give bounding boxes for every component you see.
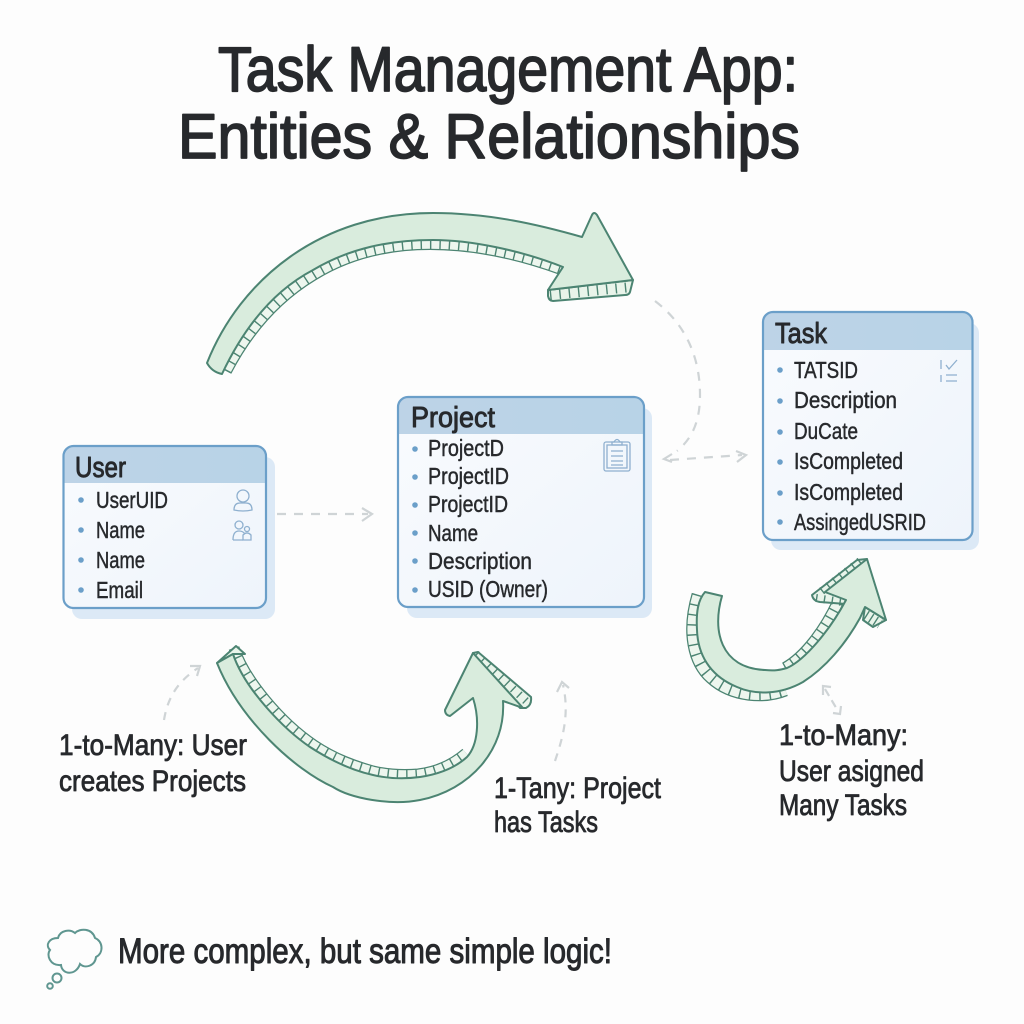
connector: dashed pointer to User arrow: [164, 666, 200, 720]
label: user assigned many tasks: [779, 719, 924, 822]
panel: User: [64, 446, 275, 619]
heading: Task: Task: [775, 318, 827, 350]
heading: Project: Project: [411, 402, 495, 434]
title: [178, 35, 800, 172]
fields: Project: Name: [428, 520, 478, 546]
fields: Task: AssingedUSRID: [794, 509, 926, 535]
fields: Task: Description: [794, 387, 897, 413]
fields: Task: DuCate: [794, 418, 858, 444]
icon: user: [234, 490, 252, 511]
label: user creates projects: creates Projects: [59, 765, 246, 798]
fields: User: Name: [96, 547, 145, 573]
fields: Project: ProjectD: [428, 435, 504, 461]
fields: User: [78, 487, 168, 603]
label: user creates projects: [59, 729, 247, 798]
icon: thought cloud: [47, 930, 102, 989]
label: user creates projects: 1-to-Many: User: [59, 729, 247, 762]
title: Task Management App:: [218, 35, 798, 105]
footer message: More complex, but same simple logic!: [118, 932, 612, 971]
arrow: lower arrow from Project to Task: [694, 559, 886, 694]
fields: Project: ProjectID: [428, 491, 508, 517]
fields: Project: ProjectID: [428, 463, 509, 489]
label: project has tasks: 1-Tany: Project: [494, 772, 662, 805]
fields: User: Name: [96, 517, 145, 543]
fields: User: UserUID: [96, 487, 168, 513]
label: user assigned many tasks: Many Tasks: [779, 789, 907, 822]
fields: Task: [777, 357, 926, 535]
connector: dashed pointer to Project arrow: [555, 682, 569, 761]
label: project has tasks: has Tasks: [494, 806, 598, 839]
connector: dashed curve from top arrow to Project: [655, 301, 700, 462]
fields: User: Email: [96, 577, 143, 603]
arrow: top curved arrow from User to Task: [207, 213, 633, 374]
fields: Project: USID (Owner): [428, 576, 548, 602]
fields: Project: [412, 435, 548, 602]
label: project has tasks: [494, 772, 662, 839]
connector: dashed arrow Project to Task: [670, 451, 746, 462]
label: user assigned many tasks: 1-to-Many:: [779, 719, 908, 752]
panel: Task: [763, 312, 979, 550]
fields: Task: IsCompleted: [794, 479, 903, 505]
fields: Project: Description: [428, 548, 532, 574]
connector: dashed arrow User to Project: [277, 508, 372, 521]
icon: clipboard: [604, 440, 630, 471]
arrow: lower arrow from User to Project: [217, 646, 531, 802]
fields: Task: TATSID: [794, 357, 858, 383]
panel: Project: [398, 397, 652, 618]
title: Entities & Relationships: [178, 102, 800, 172]
icon: checklist: [941, 360, 957, 382]
connector: dashed double arrow to Task arrow: [823, 686, 841, 714]
fields: Task: IsCompleted: [794, 448, 903, 474]
heading: User: User: [75, 452, 126, 484]
icon: users: [233, 521, 251, 540]
label: user assigned many tasks: User asigned: [779, 755, 924, 788]
